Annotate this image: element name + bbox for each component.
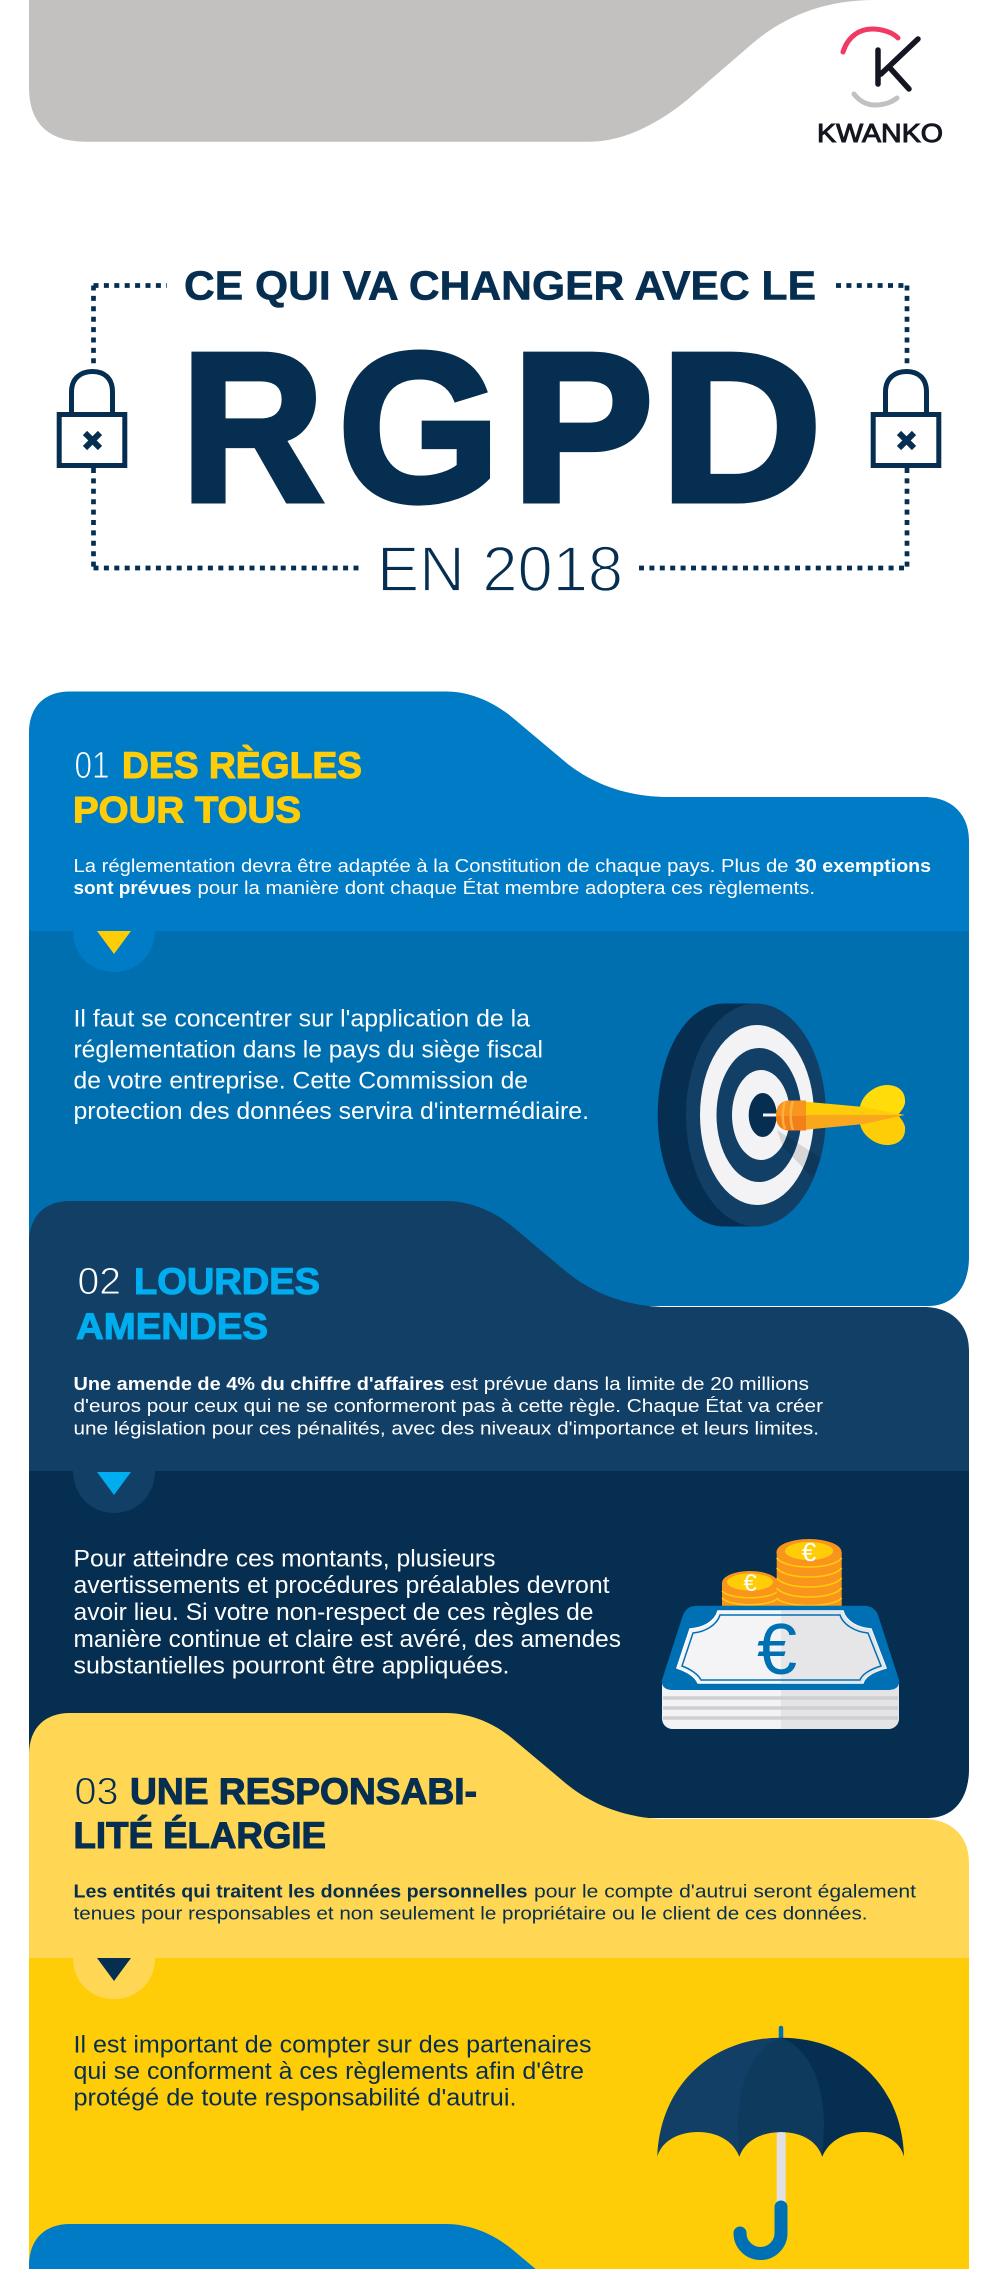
icon: left padlock [59,372,125,466]
panel 3 intro text: pour le compte d'autrui seront également [534,1882,916,1902]
panel 2 detail text: Pour atteindre ces montants, plusieurs [74,1546,496,1572]
panel 3 intro text: tenues pour responsables et non seulement le propriétaire ou le client de ces données. [74,1904,868,1924]
panel 3 intro text [74,1882,916,1924]
stack of pages [662,1680,899,1729]
heading RGPD [181,308,822,546]
panel 1 detail text: de votre entreprise. Cette Commission de [74,1068,528,1094]
panel 3 heading: UNE RESPONSABI- [130,1771,477,1812]
panel 3 detail text: protégé de toute responsabilité d'autrui. [74,2084,516,2112]
logo: Kwanko [817,29,943,148]
panel 2 heading: LOURDES [134,1261,320,1302]
logo: Kwanko: KWANKO [817,118,943,148]
title block [59,262,939,605]
panel 3 detail text [74,2032,592,2112]
panel 2 detail text: manière continue et claire est avéré, des amendes [74,1626,621,1653]
large coin stack: € [802,1537,817,1567]
heading EN 2018: EN 2018 [377,533,623,605]
panel 2 lower background [29,1471,969,1818]
icon: target with dart [658,1004,905,1226]
panel 1 detail text: protection des données servira d'intermédiaire. [74,1098,589,1125]
panel 2 intro text: Une amende de 4% du chiffre d'affaires [74,1374,444,1394]
panel 3 heading: 03 [74,1771,118,1813]
panel 1: des règles pour tous [29,692,969,1306]
banknote top [662,1606,899,1690]
panel 3 heading: LITÉ ÉLARGIE [74,1815,326,1856]
header grey shape [29,0,875,142]
small coin stack: € [743,1570,757,1597]
panel 1 intro text: pour la manière dont chaque État membre adoptera ces règlements. [198,878,815,898]
notch with arrow [73,1958,155,1999]
panel 2 heading: 02 [78,1261,121,1303]
icon: umbrella [657,2028,904,2254]
panel 3 upper background [29,1713,969,1958]
banknote top: € [757,1610,797,1690]
small coin stack [722,1570,778,1606]
panel 2 detail text: avertissements et procédures préalables devront [74,1572,610,1599]
panel 2 detail text: avoir lieu. Si votre non-respect de ces règles de [74,1599,594,1626]
panel 2 detail text: substantielles pourront être appliquées. [74,1652,509,1680]
large coin stack [776,1537,842,1606]
notch with arrow [73,931,155,972]
panel 1 intro text: sont prévues [74,878,192,898]
panel 2 heading [76,1261,320,1347]
panel 2 intro text: une législation pour ces pénalités, avec des niveaux d'importance et leurs limites. [74,1418,819,1438]
panel 2 detail text [74,1546,621,1680]
heading RGPD: D [660,308,822,546]
heading RGPD: P [512,308,654,546]
heading line 1: CE QUI VA CHANGER AVEC LE [184,262,816,308]
panel 1 intro text: 30 exemptions [795,856,931,876]
panel 1 intro text: La réglementation devra être adaptée à la Constitution de chaque pays. Plus de [74,856,788,876]
panel 1 heading [73,745,362,830]
panel 3 detail text: Il est important de compter sur des partenaires [74,2032,592,2058]
panel 1 heading: DES RÈGLES [122,745,362,786]
icon: right padlock [873,372,939,466]
panel 1 upper background [29,692,969,931]
panel 2 upper background [29,1201,969,1471]
icon: banknotes and coins [662,1537,899,1729]
heading RGPD: G [338,308,500,546]
dotted frame [94,286,907,568]
panel 1 detail text [74,1006,589,1125]
panel 2 intro text [74,1374,823,1438]
heading RGPD: R [181,308,324,546]
panel 2: lourdes amendes [29,1201,969,1818]
panel 1 intro text [74,856,931,898]
panel 2 intro text: est prévue dans la limite de 20 millions [450,1374,809,1394]
panel 2 intro text: d'euros pour ceux qui ne se conformeront pas à cette règle. Chaque État va créer [74,1396,823,1416]
panel 3 intro text: Les entités qui traitent les données personnelles [74,1882,528,1902]
panel 3 lower background [29,1958,969,2269]
panel 1 heading: POUR TOUS [73,790,301,830]
panel 1 detail text: Il faut se concentrer sur l'application de la [74,1006,531,1032]
panel 3 detail text: qui se conforment à ces règlements afin d'être [74,2058,584,2085]
panel 4: partial panel at bottom [29,2224,536,2269]
panel 1 heading: 01 [74,745,110,787]
panel 1 detail text: réglementation dans le pays du siège fiscal [74,1036,543,1064]
panel 2 heading: AMENDES [76,1306,268,1347]
panel 3 heading [74,1771,477,1856]
panel 3: une responsabilité élargie [29,1713,969,2269]
notch with arrow [73,1471,155,1513]
panel 1 lower background [29,931,969,1306]
